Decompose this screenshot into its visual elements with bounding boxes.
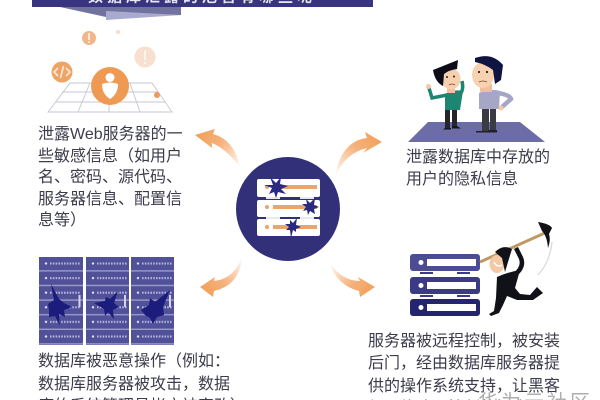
hacker raised arm xyxy=(512,248,522,277)
rack 3 xyxy=(131,257,174,345)
rack 1 xyxy=(39,257,83,345)
rack 2 xyxy=(86,257,129,345)
platform xyxy=(408,122,545,142)
text: remote control of the server xyxy=(368,332,560,400)
text: remote control of the server: 后门，经由数据库服务器提 xyxy=(368,354,560,372)
illustration: two users on a platform xyxy=(408,56,545,142)
server unit 1 xyxy=(410,254,480,271)
central icon: damaged server xyxy=(236,157,340,261)
crack 2 xyxy=(94,291,119,319)
server unit 3 xyxy=(410,299,480,316)
text: malicious database operation xyxy=(38,351,246,400)
hacker xyxy=(480,222,552,316)
text: sensitive information leak: 泄露Web服务器的一 xyxy=(38,125,183,143)
arrow: to upper left xyxy=(195,129,240,168)
pickaxe head xyxy=(538,222,552,248)
title banner xyxy=(32,0,373,20)
illustration: sensitive information on a grid xyxy=(48,30,172,112)
text: user privacy leak: 用户的隐私信息 xyxy=(406,170,518,188)
hacker body and legs xyxy=(489,270,543,316)
server row 1 xyxy=(257,179,320,197)
icon: user xyxy=(91,67,129,105)
text: remote control of the server: 供的操作系统支持，让黑客 xyxy=(368,377,560,395)
server connectors xyxy=(266,197,314,219)
server row 2 xyxy=(257,200,320,217)
grid floor xyxy=(48,83,172,112)
text: malicious database operation: 数据库被恶意操作（例如： xyxy=(38,351,230,370)
arrow: to upper right xyxy=(335,132,382,177)
icon: small dot xyxy=(116,30,120,34)
illustration: attacked server racks xyxy=(39,257,174,345)
illustration: hacker attacks server xyxy=(410,222,552,316)
crack 1 xyxy=(48,284,72,326)
hacker head xyxy=(490,255,504,273)
text: malicious database operation: 数据库服务器被攻击，数据 xyxy=(38,375,230,393)
server unit 2 xyxy=(410,277,480,294)
impact mark 3 xyxy=(285,218,301,238)
crack 3 xyxy=(141,290,170,324)
icon: code xyxy=(52,62,72,82)
icon: exclamation xyxy=(82,31,96,45)
connectors xyxy=(420,272,470,297)
text: sensitive information leak: 些敏感信息（如用户 xyxy=(38,147,182,165)
arrow: to lower left xyxy=(200,257,242,297)
impact mark 1 xyxy=(264,177,288,198)
text: user privacy leak: 泄露数据库中存放的 xyxy=(406,148,550,166)
text: sensitive information leak: 服务器信息、配置信 xyxy=(38,190,182,208)
text: sensitive information leak: 息等） xyxy=(38,211,86,229)
text: remote control of the server: 服务器被远程控制，被安装 xyxy=(368,332,560,350)
rack handles xyxy=(78,295,171,307)
text: sensitive information leak: 名、密码、源代码、 xyxy=(38,168,182,186)
text: user privacy leak xyxy=(406,148,550,188)
icon: pale exclamation xyxy=(134,46,156,68)
small man xyxy=(426,60,463,130)
server row 3 xyxy=(257,219,320,236)
arrow: to lower right xyxy=(330,263,375,297)
impact mark 2 xyxy=(302,198,319,215)
icon: orange dot xyxy=(154,92,160,98)
text: sensitive information leak xyxy=(38,125,183,229)
pickaxe handle xyxy=(480,232,547,262)
tall man xyxy=(472,56,511,132)
